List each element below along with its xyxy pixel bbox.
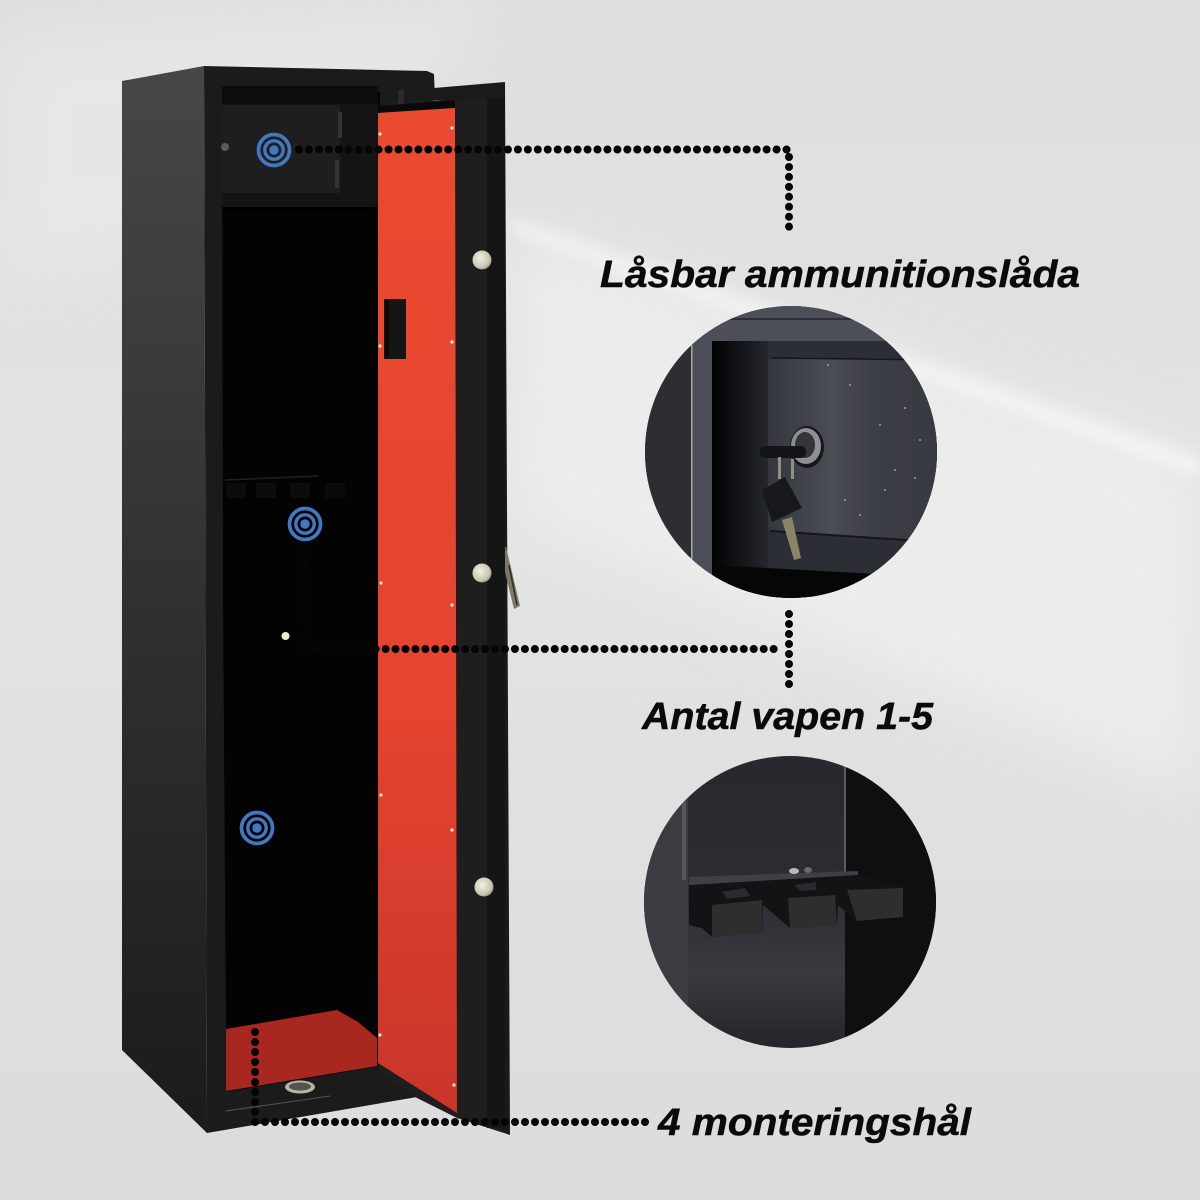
target marker: ammunition box: [258, 134, 290, 166]
door screws: [378, 126, 456, 1087]
interior peg: [282, 632, 290, 640]
door speckles: [827, 364, 921, 516]
door outer body: [378, 98, 510, 1135]
shelf plate: [689, 871, 858, 885]
box door: [768, 358, 950, 542]
dotted leader: mounting holes: [255, 1032, 650, 1122]
dotted leader: ammunition box: [299, 150, 789, 232]
red floor lining: [226, 1010, 377, 1091]
cabinet front frame: [204, 66, 435, 1133]
gun rack shelf: [225, 476, 345, 498]
right wall: [845, 766, 936, 1038]
frame strip: [692, 340, 712, 575]
lower recess: [712, 566, 872, 598]
door bolts: [472, 250, 494, 896]
door handle slot: [384, 299, 406, 359]
foam blocks: [712, 888, 903, 937]
lock cylinder: [790, 426, 824, 468]
detail photo: foam gun rack: [644, 756, 936, 1048]
door lever: [505, 547, 520, 609]
shelf screw: [789, 867, 812, 874]
gun safe with open door: [122, 66, 520, 1135]
recess side: [712, 341, 768, 611]
heading: mounting holes: 4 monteringshål: [657, 1102, 973, 1144]
foam base shadow: [689, 876, 845, 937]
target marker: mounting holes: [242, 812, 272, 844]
floor mounting hole: [285, 1080, 315, 1094]
cabinet left side panel: [122, 66, 207, 1133]
detail photo: key lock: [645, 306, 937, 598]
dotted leader: gun count vertical: [785, 614, 793, 686]
target marker: gun count: [290, 508, 320, 540]
recess back: [768, 341, 937, 598]
heading: number of guns: Antal vapen 1-5: [641, 696, 934, 738]
left wall: [645, 344, 692, 560]
cabinet interior: [222, 86, 380, 1092]
key: [760, 446, 806, 560]
heading: lockable ammunition box: Låsbar ammunitionslåda: [600, 254, 1080, 296]
door back edge: [378, 82, 510, 1135]
left strip: [644, 798, 688, 1006]
ammunition box: [221, 86, 378, 210]
dotted leader: gun count: [306, 545, 780, 649]
top frame: [696, 306, 886, 341]
door hinge: [398, 90, 404, 104]
red door lining: [378, 108, 457, 1113]
